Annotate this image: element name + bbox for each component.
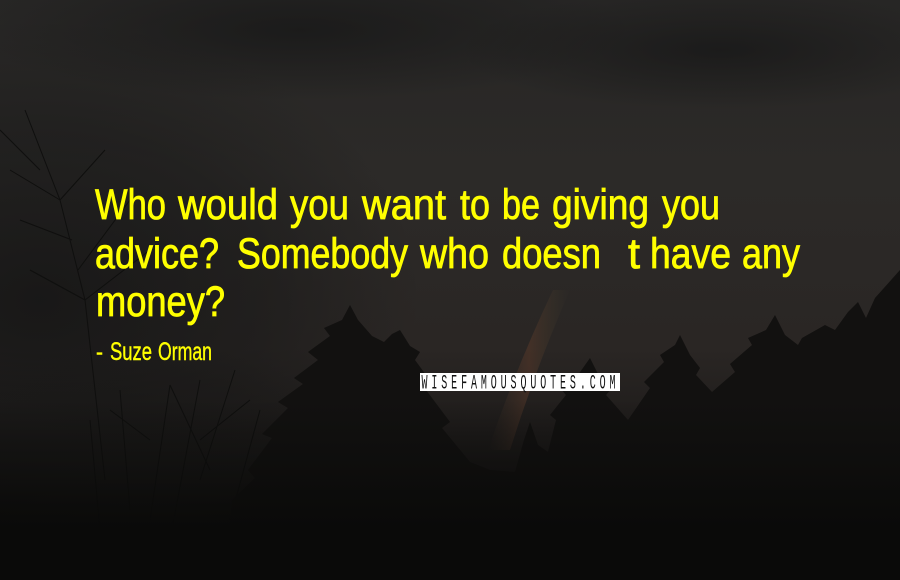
quote line 2: advice? xyxy=(95,230,219,278)
conifer silhouettes xyxy=(225,270,900,580)
quote line 2: t xyxy=(628,230,640,278)
quote line 2: Somebody xyxy=(237,230,408,278)
quote line 1: to xyxy=(460,181,490,229)
hazy bare-tree zone xyxy=(0,340,360,580)
quote line 1: Who xyxy=(95,181,166,229)
quote line 1 xyxy=(95,181,720,229)
quote line 3: money? xyxy=(96,278,225,326)
quote line 1: would xyxy=(177,181,278,229)
quote line 2: have xyxy=(650,230,731,278)
quote line 2 xyxy=(95,230,800,278)
quote line 1: you xyxy=(290,181,349,229)
bare branches xyxy=(0,110,260,540)
quote line 1: you xyxy=(662,181,720,229)
author attribution xyxy=(96,338,212,366)
foreground shadow xyxy=(0,400,900,530)
rainbow xyxy=(488,290,570,450)
quote line 2: who xyxy=(419,230,489,278)
watermark badge: WISEFAMOUSQUOTES.COM xyxy=(422,372,619,395)
quote line 1: be xyxy=(502,181,540,229)
author attribution: - xyxy=(96,338,103,366)
author attribution: Orman xyxy=(158,338,212,366)
quote text xyxy=(95,181,800,326)
quote line 2: any xyxy=(742,230,800,278)
quote line 1: giving xyxy=(552,181,649,229)
quote line 1: want xyxy=(361,181,446,229)
quote line 2: doesn xyxy=(502,230,601,278)
author attribution: Suze xyxy=(110,338,152,366)
